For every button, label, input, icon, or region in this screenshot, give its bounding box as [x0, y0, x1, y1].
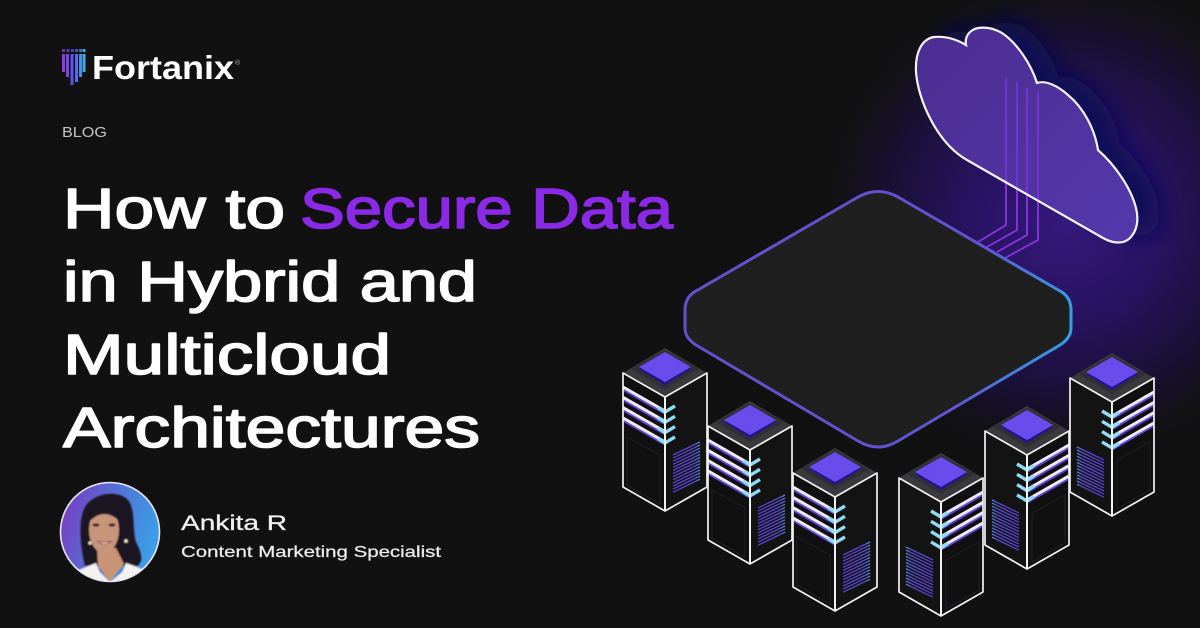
central platform	[685, 192, 1071, 447]
logo wordmark: Fortanix	[92, 49, 235, 86]
registered mark: ®	[235, 59, 241, 67]
title: Architectures	[63, 396, 480, 460]
server 3	[793, 448, 877, 611]
server 2	[708, 401, 792, 564]
server 1	[623, 348, 707, 511]
logo	[62, 49, 241, 86]
title: Secure Data	[300, 177, 673, 241]
server 4	[899, 453, 983, 616]
connector lines seen through cloud	[1006, 78, 1038, 204]
connector lines from cloud to platform	[978, 78, 1038, 258]
category label: BLOG	[62, 124, 107, 141]
purple glow behind cloud	[815, 0, 1200, 470]
author name: Ankita R	[181, 512, 287, 535]
server 5	[985, 406, 1069, 569]
cloud	[916, 28, 1137, 243]
cloud outline	[916, 28, 1137, 243]
title: in Hybrid and	[63, 250, 477, 314]
server 6	[1070, 353, 1154, 516]
title: How to	[63, 177, 285, 241]
title	[63, 177, 673, 460]
author role: Content Marketing Specialist	[181, 544, 442, 561]
author avatar	[60, 482, 160, 590]
icon: Fortanix logo mark	[62, 49, 86, 85]
title: Multicloud	[63, 323, 391, 387]
